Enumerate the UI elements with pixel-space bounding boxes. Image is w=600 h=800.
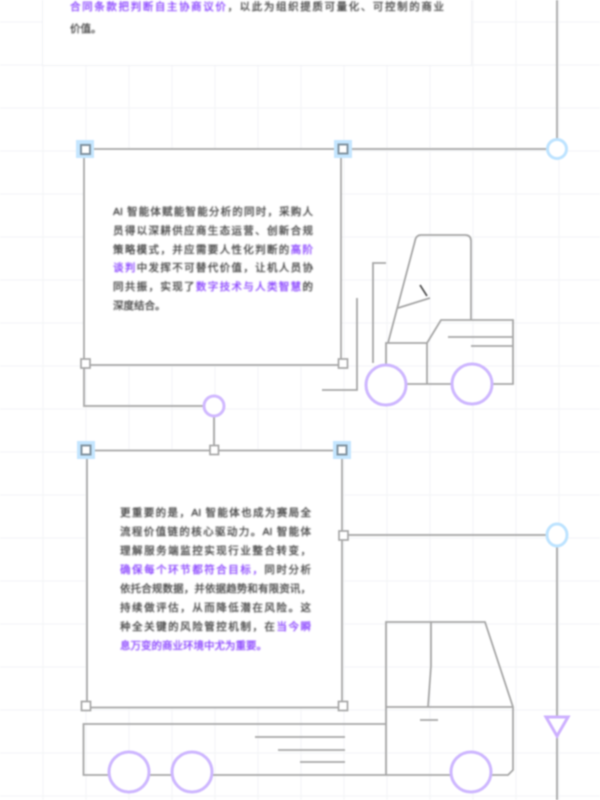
text: second box paragraph: 息万变的商业环境中尤为重要。 <box>120 640 267 652</box>
text: first box paragraph: AI 智能体赋能智能分析的同时，采购人 <box>113 206 313 218</box>
panel: first text box <box>84 149 341 365</box>
text: first box paragraph: 谈判中发挥不可替代价值，让机人员协 <box>113 262 313 274</box>
illustration: forklift <box>322 235 513 405</box>
text: second box paragraph <box>119 506 312 652</box>
arrow: purple triangle <box>546 717 568 736</box>
text: second box paragraph: 更重要的是，AI 智能体也成为赛局全 <box>120 507 311 519</box>
text: second box paragraph: 确保每个环节都符合目标，同时分析 <box>120 564 311 576</box>
panel: top text card <box>42 0 472 66</box>
text: second box paragraph: 依托合规数据，并依据趋势和有限资讯， <box>120 583 311 595</box>
text: second box paragraph: 理解服务端监控实现行业整合转变， <box>120 545 311 557</box>
second box outline <box>87 450 342 708</box>
connector: right of second box <box>343 535 557 800</box>
panel: second text box <box>87 450 342 708</box>
connector: top right <box>343 0 557 149</box>
text: top card paragraph: 价值。 <box>70 23 102 35</box>
text: first box paragraph: 策略模式，并应需要人性化判断的高阶 <box>113 244 313 256</box>
text: first box paragraph: 同共振，实现了数字技术与人类智慧的 <box>113 281 313 293</box>
text: second box paragraph: 流程价值链的核心驱动力。AI 智能体 <box>120 526 311 538</box>
text: second box paragraph: 种全关键的风险管控机制，在当今瞬 <box>120 621 311 633</box>
text: first box paragraph: 员得以深耕供应商生态运营、创新合规 <box>113 225 313 237</box>
node: blue circle top <box>548 140 566 158</box>
node: blue circle middle <box>547 524 567 546</box>
handles: selected corners <box>76 140 352 459</box>
illustration: truck <box>84 622 513 792</box>
text: first box paragraph: 深度结合。 <box>113 300 166 312</box>
text: first box paragraph <box>112 204 314 312</box>
first box outline <box>84 149 341 365</box>
connector: between boxes <box>84 364 214 450</box>
text: top card paragraph <box>69 0 444 35</box>
node: purple circle <box>204 396 224 416</box>
handles: plain <box>81 359 348 710</box>
text: top card paragraph: 合同条款把判断自主协商议价，以此为组织提质可量化、可控制的商业 <box>70 1 444 13</box>
text: second box paragraph: 持续做评估，从而降低潜在风险。这 <box>120 602 311 614</box>
